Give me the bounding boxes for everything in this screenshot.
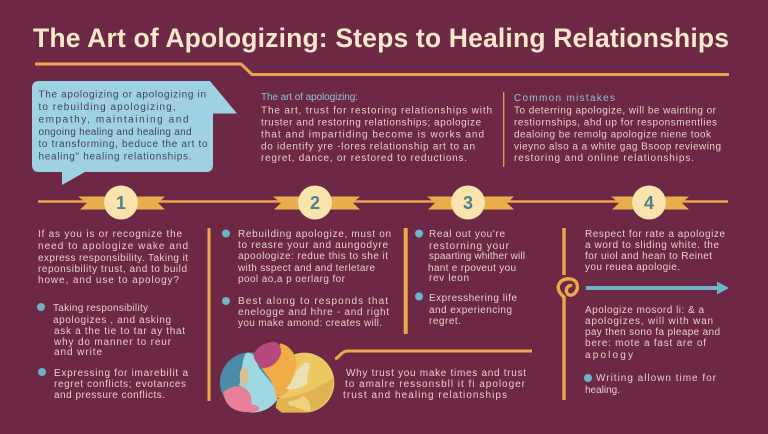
- column 1 bullet: expressing: regret conflicts; evotances: [54, 379, 186, 390]
- panel: common mistakes: restiornships, ahd up for responsmentlies: [514, 118, 717, 128]
- column 4 bullet: writing: [584, 373, 717, 396]
- step 2 marker: 2: [310, 193, 320, 213]
- column 1 bullet: taking responsibility: Taking responsibility: [53, 303, 148, 314]
- column 1 intro text: howe, and use to apology?: [38, 275, 179, 286]
- step 4 marker: [611, 186, 689, 220]
- panel: the art of apologizing: regret, dance, or restored to reductions.: [261, 153, 467, 164]
- column 1 bullet: taking responsibility: [37, 303, 185, 358]
- callout text: trust and healing relationships: [343, 390, 507, 401]
- column 4 middle text: [585, 305, 720, 361]
- panel: the art of apologizing: do identify yre -lores relationship art to an: [261, 142, 475, 152]
- panel: the art of apologizing: truster and restoring relationships; apologize: [261, 118, 481, 128]
- panel: the art of apologizing: that and impartiding become is works and: [261, 130, 484, 140]
- column 2 bullet: rebuilding: to reasre your and aungodyre: [238, 240, 388, 251]
- step 3 marker: [427, 186, 514, 220]
- divider column 2 and 3: [404, 228, 408, 334]
- column 4 middle text: apologizes, will with wan: [585, 316, 713, 327]
- column 4 top text: for uiol and hean to Reinet: [585, 251, 712, 262]
- column 3 bullet: real out: rev leon: [429, 273, 469, 284]
- column 1 intro text: [38, 229, 188, 286]
- panel: common mistakes: dealoing be remolg apologize niene took: [514, 130, 712, 140]
- column 2 bullet: best along: Best along to responds that: [238, 296, 388, 307]
- column 1 bullet: expressing: and pressure conflicts.: [54, 390, 165, 401]
- column 2 bullet: rebuilding: with sspect and and terletare: [237, 263, 375, 274]
- panel: common mistakes: To deterring apologize, will be wainting or: [514, 106, 717, 116]
- column 4 middle text: pay then sono fa pleape and: [585, 327, 720, 338]
- callout text: [343, 368, 526, 401]
- column 3 bullet: real out: [415, 229, 525, 284]
- column 2 bullet: rebuilding: apoologize: redue this to she it: [238, 251, 388, 262]
- column 1 bullet: taking responsibility: ask a the tie to tar ay that: [54, 326, 185, 337]
- column 1 bullet: taking responsibility: why do manner to reur: [53, 337, 172, 348]
- column 2 bullet: rebuilding: Rebuilding apologize, must on: [238, 229, 391, 240]
- column 1 intro text: need to apologize wake and: [38, 241, 188, 252]
- column 1 intro text: reponsibility trust, and to build: [38, 264, 187, 275]
- step timeline: [38, 186, 728, 220]
- column 2 bullet: best along: enelogge and hhre - and right: [238, 307, 389, 318]
- panel: speech bubble intro: empathy, maintaining and: [38, 114, 188, 126]
- column 4 bullet: writing: healing.: [585, 385, 620, 396]
- panel: common mistakes: restoring and online relationships.: [514, 153, 694, 164]
- column 3 bullet: real out: hant e rpoveut you: [428, 263, 516, 274]
- arrow: [586, 282, 729, 294]
- column 1 bullet: expressing: [38, 368, 188, 401]
- panel: speech bubble intro: to rebuilding apologizing,: [38, 102, 176, 113]
- column 1 bullet: taking responsibility: apologizes , and asking: [53, 315, 171, 326]
- title: The Art of Apologizing: Steps to Healing Relationships: [33, 23, 729, 53]
- column 4 top text: a word to sliding white. the: [585, 240, 719, 251]
- column 1 intro text: If as you is or recognize the: [38, 229, 182, 240]
- column 2 bullet: rebuilding: [222, 229, 391, 285]
- column 2 bullet: best along: [222, 296, 389, 329]
- panel: the art of apologizing: [261, 92, 492, 164]
- column 4 middle text: Apologize mosord li: & a: [585, 305, 704, 316]
- column 4 middle text: bere: mote a fast are of: [585, 338, 706, 349]
- column 3 bullet: expressing: regret.: [429, 316, 461, 327]
- step 1 marker: 1: [116, 193, 126, 213]
- panel: speech bubble intro: healing" healing relationships.: [38, 152, 192, 162]
- column 4 middle text: apology: [585, 350, 633, 361]
- column 3 bullet: expressing: Expresshering life: [429, 293, 517, 304]
- step 3 marker: 3: [463, 193, 473, 213]
- column 4 top text: you reuea apologie.: [585, 262, 680, 273]
- column 3 bullet: real out: Real out you're: [429, 229, 505, 240]
- column 4 bullet: writing: Writing allown time for: [596, 373, 717, 384]
- column 2 bullet: best along: you make amond: creates will.: [238, 318, 382, 329]
- callout text: Why trust you make times and trust: [346, 368, 526, 379]
- column 2 bullet: rebuilding: pool ao,a p oerlarg for: [238, 274, 346, 285]
- step 2 marker: [273, 186, 360, 220]
- column 1 bullet: expressing: Expressing for imarebilit a: [54, 368, 188, 379]
- panel: common mistakes: Common mistakes: [514, 93, 615, 104]
- step 4 marker: 4: [644, 193, 654, 213]
- column 1 intro text: express responsibility. Taking it: [38, 253, 188, 264]
- column 4 top text: Respect for rate a apologize: [585, 229, 725, 240]
- column 3 bullet: real out: spaarting whither will: [429, 251, 525, 262]
- panel: the art of apologizing: The art, trust for restoring relationships with: [261, 106, 492, 116]
- panel: speech bubble intro: ongoing healing and healing and: [38, 127, 192, 138]
- column 1 bullet: taking responsibility: and write: [54, 347, 102, 358]
- panel: the art of apologizing: The art of apologizing:: [261, 92, 358, 103]
- divider column 1 and 2: [208, 228, 210, 401]
- illustration: overlapping faces: [220, 342, 334, 413]
- panel: common mistakes: [514, 93, 721, 164]
- column 4 top text: [585, 229, 725, 273]
- panel: speech bubble intro: to transforming, beduce the art to: [38, 139, 208, 150]
- panel: speech bubble intro: [32, 81, 237, 185]
- callout text: to amalre ressonsbll it fi apologer: [345, 379, 526, 390]
- column 4 spiral divider: [558, 228, 577, 400]
- step 1 marker: [78, 186, 165, 220]
- callout connector: [335, 351, 532, 359]
- column 3 bullet: expressing: and experiencing: [429, 305, 512, 316]
- column 3 bullet: real out: restorning your: [429, 241, 510, 252]
- column 3 bullet: expressing: [415, 292, 517, 327]
- divider line: [503, 92, 505, 167]
- panel: common mistakes: vieyno also a a white gag Bsoop reviewing: [514, 142, 721, 152]
- title underline: [35, 64, 729, 74]
- panel: speech bubble intro: The apologizing or apologizing in: [38, 90, 206, 100]
